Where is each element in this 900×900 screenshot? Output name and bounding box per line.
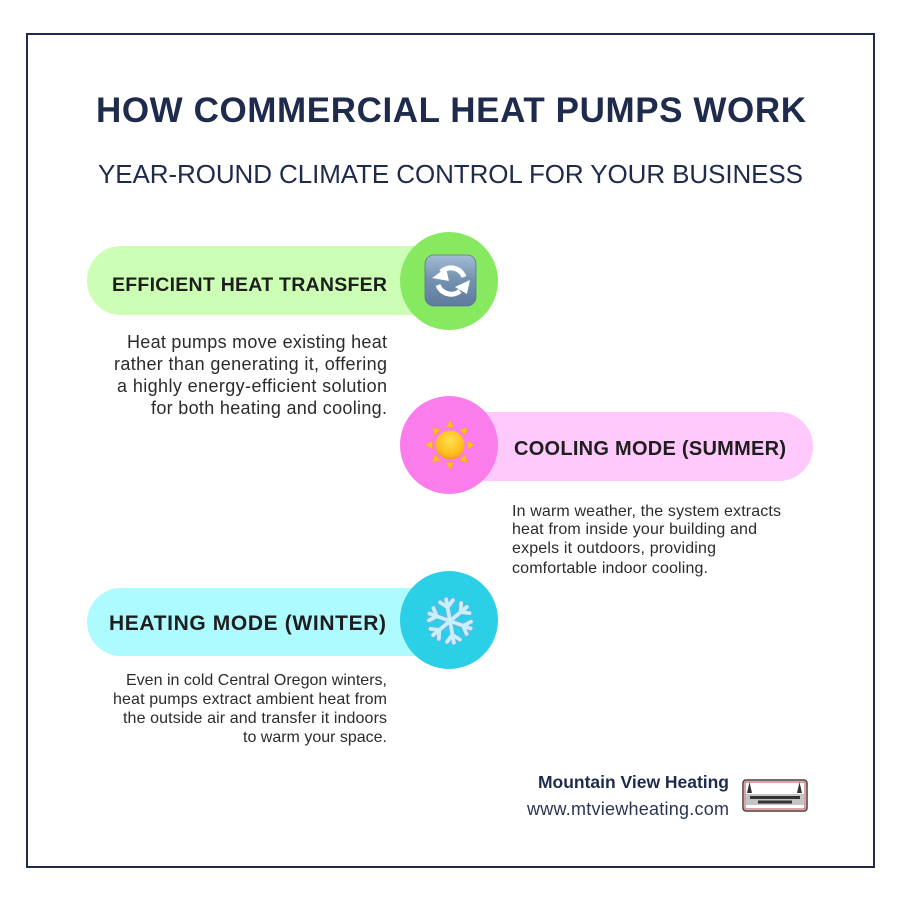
text block: cooling mode: expels it outdoors, providing bbox=[512, 540, 716, 557]
pill header: cooling mode bbox=[453, 412, 813, 481]
footer: company name: Mountain View Heating bbox=[538, 772, 729, 792]
text block: cooling mode bbox=[512, 503, 781, 577]
title: HOW COMMERCIAL HEAT PUMPS WORK bbox=[96, 91, 806, 130]
icon circle: pink bbox=[400, 396, 498, 494]
text block: heating mode: Even in cold Central Oregon winters, bbox=[126, 672, 387, 689]
text block: heating mode: to warm your space. bbox=[243, 729, 387, 746]
text block: cooling mode: heat from inside your building and bbox=[512, 521, 757, 538]
icon circle: cyan bbox=[400, 571, 498, 669]
heading: efficient heat transfer: EFFICIENT HEAT TRANSFER bbox=[112, 274, 387, 296]
heading: cooling mode: COOLING MODE (SUMMER) bbox=[514, 438, 786, 460]
text block: cooling mode: comfortable indoor cooling. bbox=[512, 560, 708, 577]
icon: snowflake bbox=[427, 598, 473, 644]
text block: cooling mode: In warm weather, the system extracts bbox=[512, 503, 781, 520]
icon: refresh arrows bbox=[425, 255, 476, 306]
logo: Mountain View Heating bbox=[743, 780, 807, 811]
panel: heating mode bbox=[87, 571, 498, 746]
text block: efficient heat transfer bbox=[114, 332, 387, 418]
text block: efficient heat transfer: Heat pumps move existing heat bbox=[127, 332, 387, 352]
panel: efficient heat transfer bbox=[87, 232, 498, 418]
text block: efficient heat transfer: a highly energy-efficient solution bbox=[117, 376, 387, 396]
text block: heating mode: heat pumps extract ambient heat from bbox=[113, 691, 387, 708]
text block: heating mode: the outside air and transfer it indoors bbox=[123, 710, 387, 727]
icon: sun bbox=[426, 420, 474, 470]
pill header: efficient heat transfer bbox=[87, 246, 447, 315]
footer: website: www.mtviewheating.com bbox=[526, 799, 729, 819]
text block: efficient heat transfer: rather than generating it, offering bbox=[114, 354, 387, 374]
heading: heating mode: HEATING MODE (WINTER) bbox=[109, 612, 386, 635]
text block: efficient heat transfer: for both heating and cooling. bbox=[151, 398, 387, 418]
panel: cooling mode bbox=[400, 396, 813, 577]
icon circle: green bbox=[400, 232, 498, 330]
subtitle: YEAR-ROUND CLIMATE CONTROL FOR YOUR BUSINESS bbox=[98, 159, 803, 189]
pill header: heating mode bbox=[87, 588, 447, 656]
text block: heating mode bbox=[113, 672, 387, 746]
